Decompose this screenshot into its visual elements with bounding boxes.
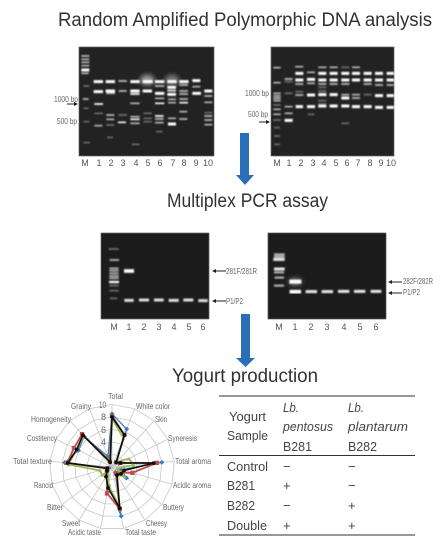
table: yogurt samples: + bbox=[283, 518, 291, 533]
gel labels: RAPD right: 10 bbox=[386, 158, 396, 168]
gel labels: multiplex PCR right: 1 bbox=[292, 322, 298, 332]
gel labels: RAPD right: 2 bbox=[298, 158, 304, 168]
gel labels: RAPD right: 5 bbox=[333, 158, 339, 168]
radar labels: Skin bbox=[155, 414, 167, 424]
gel labels: multiplex PCR right: 5 bbox=[357, 322, 363, 332]
gel labels: multiplex PCR right: 2 bbox=[308, 322, 314, 332]
radar labels: Costitency bbox=[27, 433, 58, 443]
gel labels: RAPD left: 1000 bp bbox=[54, 94, 78, 104]
radar labels: White color bbox=[136, 401, 170, 411]
gel: multiplex PCR left bbox=[101, 233, 209, 319]
gel labels: RAPD left: 3 bbox=[120, 158, 126, 168]
gel labels: RAPD left: 7 bbox=[170, 158, 176, 168]
radar labels: Grainy bbox=[71, 401, 92, 411]
gel labels: multiplex PCR left: 281F/281R bbox=[226, 266, 257, 276]
gel labels: multiplex PCR right: 282F/282R bbox=[403, 276, 433, 286]
table: yogurt samples: − bbox=[348, 478, 356, 493]
table: yogurt samples: Lb. bbox=[348, 400, 364, 415]
gel labels: multiplex PCR left: M bbox=[110, 322, 118, 332]
table: yogurt samples: Double bbox=[227, 518, 267, 533]
table: yogurt samples: + bbox=[348, 498, 356, 513]
gel labels: multiplex PCR right: M bbox=[275, 322, 283, 332]
heading: Yogurt production: Yogurt production bbox=[172, 366, 318, 387]
series: red bbox=[67, 416, 157, 509]
gel labels: multiplex PCR left: 1 bbox=[126, 322, 132, 332]
radar labels: Buttery bbox=[163, 502, 185, 512]
series: black bbox=[68, 417, 154, 508]
arrow: RAPD to multiplex PCR bbox=[236, 133, 254, 185]
gel labels: multiplex PCR right bbox=[275, 276, 433, 332]
gel labels: RAPD left: 4 bbox=[133, 158, 139, 168]
gel labels: RAPD right: 6 bbox=[344, 158, 350, 168]
gel: multiplex PCR right bbox=[268, 233, 386, 319]
radar labels: Sweet bbox=[62, 518, 80, 528]
gel labels: multiplex PCR right: P1/P2 bbox=[403, 287, 420, 297]
table: yogurt samples: Yogurt bbox=[229, 409, 266, 424]
gel labels: multiplex PCR left: 5 bbox=[186, 322, 192, 332]
gel labels: multiplex PCR left: 4 bbox=[171, 322, 177, 332]
gel labels: multiplex PCR left bbox=[110, 266, 257, 332]
series: green bbox=[68, 418, 134, 507]
table: yogurt samples: plantarum bbox=[347, 419, 408, 434]
gel labels: RAPD right: 4 bbox=[321, 158, 327, 168]
table: yogurt samples: B281 bbox=[283, 439, 312, 454]
series: blue bbox=[65, 414, 162, 516]
gel labels: RAPD right: 9 bbox=[378, 158, 384, 168]
radar labels: Acidic taste bbox=[68, 527, 101, 537]
gel labels: RAPD right: 7 bbox=[355, 158, 361, 168]
gel labels: RAPD right: M bbox=[273, 158, 281, 168]
radar labels: Total texture bbox=[13, 456, 52, 466]
gel labels: RAPD right bbox=[245, 88, 396, 168]
radar chart: sensory scores bbox=[13, 391, 211, 537]
radar labels: Homogeneity bbox=[31, 414, 72, 424]
gel labels: RAPD left: 5 bbox=[145, 158, 151, 168]
arrow: multiplex PCR to yogurt production bbox=[236, 314, 255, 367]
radar labels: Total taste bbox=[125, 527, 156, 537]
gel labels: RAPD left bbox=[54, 94, 213, 168]
gel labels: multiplex PCR right: 3 bbox=[324, 322, 330, 332]
radar labels: 4 bbox=[101, 437, 106, 447]
radar labels: 6 bbox=[101, 425, 106, 435]
table: yogurt samples: − bbox=[283, 459, 291, 474]
gel labels: multiplex PCR left: P1/P2 bbox=[226, 296, 243, 306]
radar labels: Acidic aroma bbox=[173, 480, 211, 490]
radar labels: Syneresis bbox=[168, 433, 197, 443]
gel labels: RAPD left: 9 bbox=[193, 158, 199, 168]
gel labels: multiplex PCR left: 3 bbox=[156, 322, 162, 332]
gel labels: multiplex PCR right: 4 bbox=[341, 322, 347, 332]
table: yogurt samples: B281 bbox=[227, 478, 255, 493]
radar labels: Total bbox=[108, 391, 123, 401]
radar labels bbox=[13, 391, 211, 537]
radar labels: Cheesy bbox=[146, 518, 168, 528]
table: yogurt samples: − bbox=[283, 498, 291, 513]
gel labels: multiplex PCR right: 6 bbox=[373, 322, 379, 332]
radar labels: Bitter bbox=[47, 502, 63, 512]
gel: RAPD left bbox=[79, 47, 214, 156]
gel labels: RAPD left: 1 bbox=[96, 158, 102, 168]
gel labels: RAPD left: 10 bbox=[203, 158, 213, 168]
table: yogurt samples: Control bbox=[227, 459, 268, 474]
radar labels: 10 bbox=[99, 400, 106, 410]
radar labels: Total aroma bbox=[175, 456, 211, 466]
gel labels: RAPD left: 8 bbox=[181, 158, 187, 168]
gel labels: RAPD right: 8 bbox=[367, 158, 373, 168]
table: yogurt samples: B282 bbox=[348, 439, 377, 454]
table: yogurt samples bbox=[219, 396, 415, 535]
table: yogurt samples: + bbox=[283, 478, 291, 493]
gel labels: RAPD left: M bbox=[81, 158, 89, 168]
gel labels: RAPD left: 6 bbox=[157, 158, 163, 168]
table: yogurt samples: Lb. bbox=[283, 400, 299, 415]
radar labels: 8 bbox=[101, 412, 106, 422]
table: yogurt samples: B282 bbox=[227, 498, 255, 513]
gel labels: RAPD right: 500 bp bbox=[248, 109, 268, 119]
gel: RAPD right bbox=[271, 47, 394, 156]
gel labels: multiplex PCR left: 2 bbox=[141, 322, 147, 332]
table: yogurt samples: − bbox=[348, 459, 356, 474]
gel labels: RAPD right: 1 bbox=[286, 158, 292, 168]
gel labels: RAPD left: 2 bbox=[108, 158, 114, 168]
gel labels: RAPD right: 1000 bp bbox=[245, 88, 269, 98]
table: yogurt samples: Sample bbox=[227, 428, 268, 443]
gel labels: multiplex PCR left: 6 bbox=[200, 322, 206, 332]
radar labels: Rancid bbox=[34, 480, 53, 490]
gel labels: RAPD left: 500 bp bbox=[57, 116, 77, 126]
table: yogurt samples: pentosus bbox=[282, 419, 333, 434]
heading: Multiplex PCR assay: Multiplex PCR assay bbox=[167, 191, 328, 212]
gel labels: RAPD right: 3 bbox=[310, 158, 316, 168]
table: yogurt samples: + bbox=[348, 518, 356, 533]
title: RAPD analysis: Random Amplified Polymorphic DNA analysis bbox=[58, 10, 432, 31]
